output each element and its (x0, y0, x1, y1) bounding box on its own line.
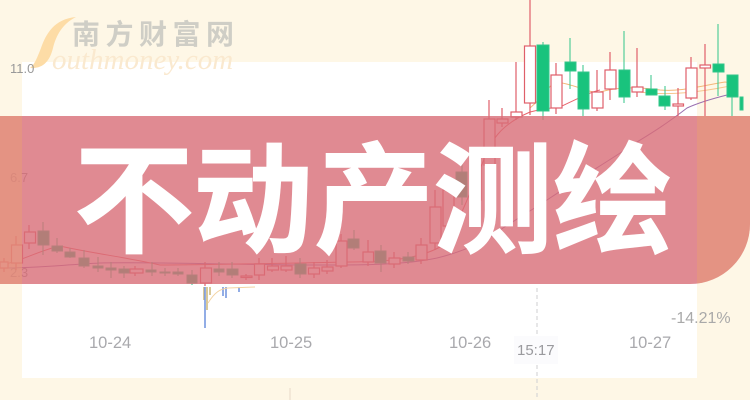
panel: white chart background (22, 62, 697, 378)
price axis labels: 6.7 (10, 170, 28, 185)
label: percentage change: -14.21% (671, 310, 731, 327)
logo: southmoney watermark: 南方财富网 (72, 13, 240, 53)
title: 不 (74, 104, 194, 278)
chart: green candlesticks (38, 24, 743, 285)
logo: southmoney watermark (30, 13, 240, 76)
title: 动 (193, 104, 313, 278)
axis: date labels (89, 334, 671, 352)
label: time tag (514, 336, 558, 364)
chart: volume spikes below band (204, 287, 255, 328)
title: 测 (433, 104, 553, 278)
title (74, 104, 673, 278)
tick mark (289, 388, 291, 400)
logo: southmoney watermark: outhmoney.com (52, 44, 233, 76)
price axis labels (10, 61, 34, 280)
band: left tinted edge (0, 116, 22, 284)
band: pink title strip (0, 116, 750, 284)
axis: date labels: 10-24 (89, 334, 131, 352)
label: time tag: 15:17 (517, 342, 555, 359)
chart: red candlesticks (0, 0, 710, 286)
crosshair: dashed time line (536, 288, 538, 400)
band: right tinted edge (697, 116, 750, 284)
title: 产 (314, 104, 434, 278)
title: 绘 (553, 104, 673, 278)
price axis labels: 2.3 (10, 265, 28, 280)
axis: date labels: 10-27 (629, 334, 671, 352)
line: moving averages (0, 82, 738, 268)
axis: date labels: 10-26 (449, 334, 491, 352)
axis: date labels: 10-25 (270, 334, 312, 352)
price axis labels: 11.0 (10, 61, 34, 76)
